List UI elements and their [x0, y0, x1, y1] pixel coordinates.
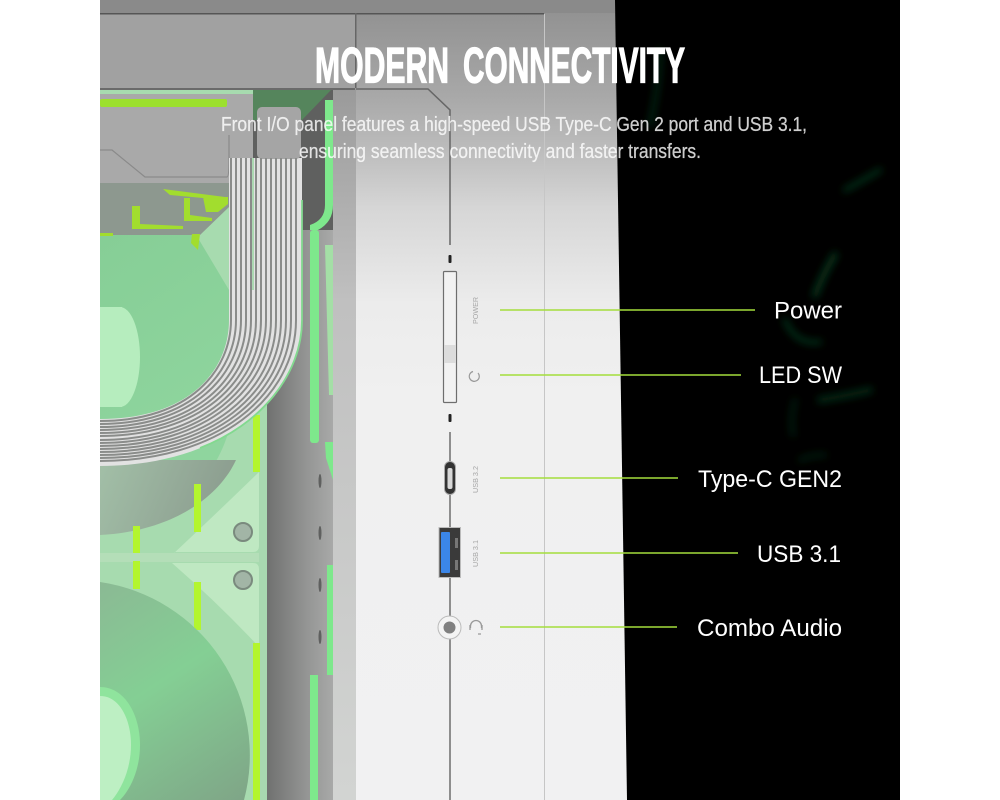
port print labels: POWER	[473, 297, 480, 324]
green wedge	[253, 90, 331, 120]
power and LED switch buttons	[444, 272, 456, 402]
port print labels	[473, 297, 480, 567]
port print labels: USB 3.1	[473, 540, 480, 567]
headset icon	[470, 620, 482, 634]
screws	[234, 523, 252, 589]
top reservoir block	[100, 94, 253, 250]
callout lines	[500, 310, 755, 627]
fan frame with glowing strips	[100, 415, 267, 800]
title: CONNECTIVITY	[463, 38, 685, 94]
USB 3.1 port	[439, 528, 460, 578]
callout labels: LED SW	[759, 362, 842, 389]
braided tube	[100, 107, 302, 466]
subtitle: Front I/O panel features a high-speed USB Type-C Gen 2 port and USB 3.1,	[221, 114, 807, 136]
upper fan	[100, 233, 229, 533]
vertical slot line	[449, 432, 451, 800]
port print labels: USB 3.2	[473, 466, 480, 493]
callout labels: Power	[774, 298, 842, 324]
interior: fans and radiator area	[100, 88, 333, 800]
subtitle	[221, 114, 807, 163]
side glow strips	[310, 100, 333, 800]
dark side channel	[267, 88, 333, 800]
black background with green smoke	[615, 0, 900, 800]
vertical column	[333, 88, 356, 800]
power button slot marks	[448, 255, 452, 422]
photo: PC case front	[100, 0, 900, 800]
channel holes	[318, 474, 322, 644]
upper dark recess	[253, 90, 333, 230]
lower fan	[100, 582, 250, 800]
callout labels	[697, 298, 842, 642]
USB-C port	[444, 462, 456, 494]
subtitle: ensuring seamless connectivity and faster transfers.	[299, 141, 701, 163]
upper fan rim	[100, 460, 236, 535]
callout labels: Type-C GEN2	[698, 466, 842, 493]
LED switch icon	[469, 372, 479, 381]
title	[315, 38, 685, 94]
title: MODERN	[315, 38, 449, 94]
callout labels: USB 3.1	[757, 541, 841, 568]
front panel	[356, 0, 628, 800]
callout labels: Combo Audio	[697, 615, 842, 642]
combo audio jack	[438, 616, 461, 639]
top case band	[100, 0, 615, 90]
